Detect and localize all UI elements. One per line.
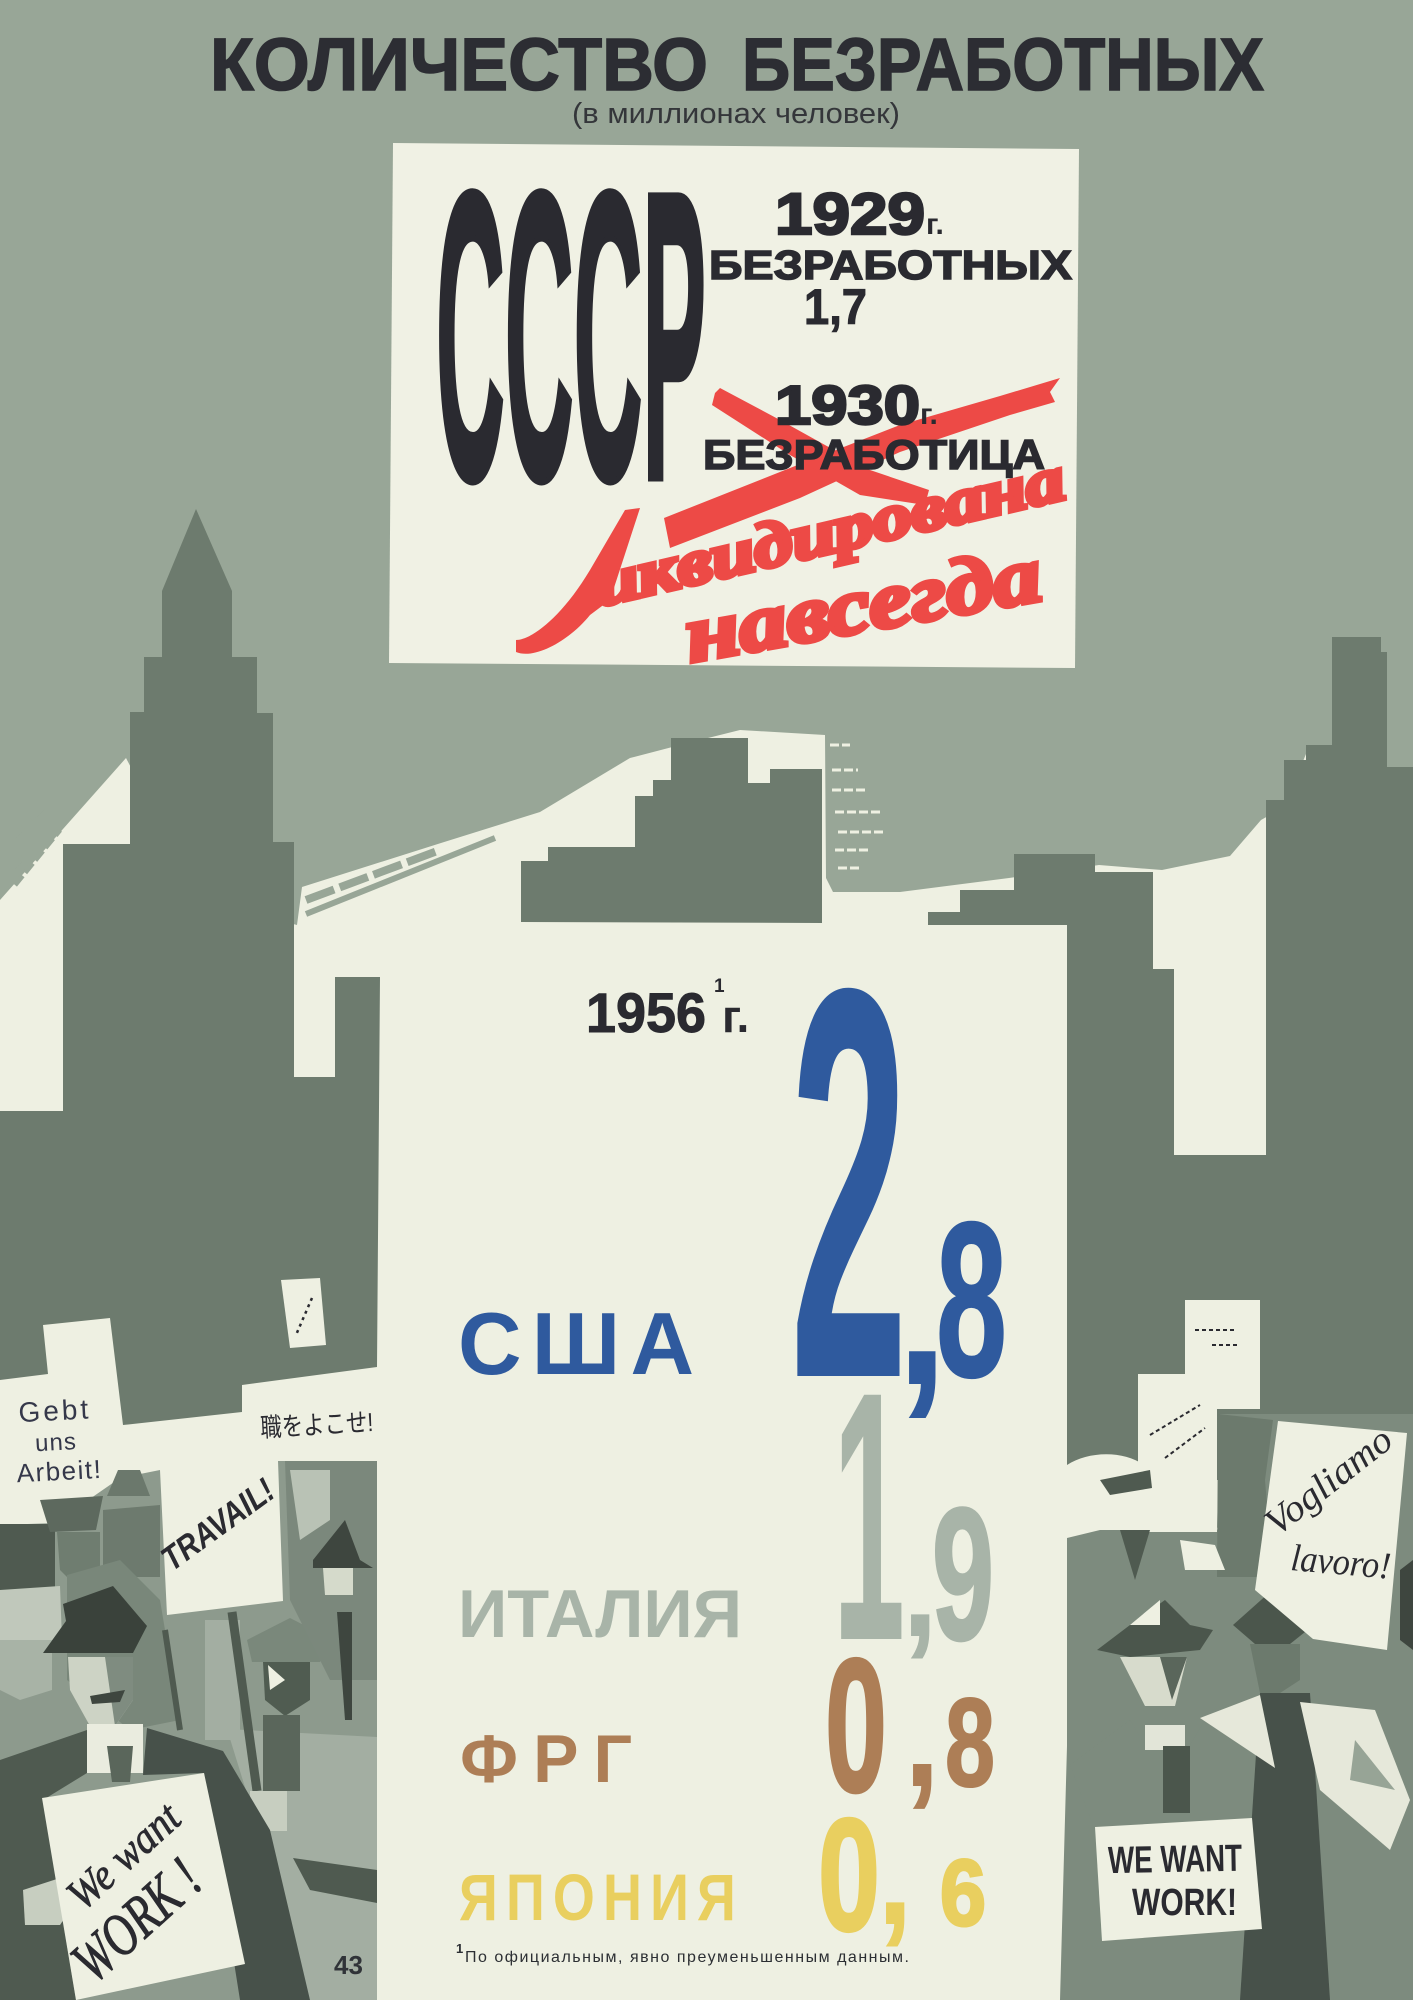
row: USA 2.8 xyxy=(458,873,1007,1494)
row: Italy 1.9: ИТАЛИЯ xyxy=(458,1576,742,1652)
sign: Gebt uns Arbeit: Arbeit! xyxy=(16,1454,103,1488)
subtitle: (в миллионах человек) xyxy=(572,98,900,130)
year 1956: 1 xyxy=(714,976,725,997)
row: Japan 0.6: 0 xyxy=(818,1785,880,1964)
sign: Gebt uns Arbeit: uns xyxy=(34,1428,78,1457)
paper windows right xyxy=(1138,1300,1260,1480)
unemployed label: БЕЗРАБОТНЫХ xyxy=(709,242,1072,288)
row: Italy 1.9: 1 xyxy=(833,1319,905,1715)
red slogan xyxy=(516,442,1071,680)
footnote xyxy=(456,1941,909,1966)
panel: green sky background xyxy=(0,0,1413,925)
row: USA 2.8: США xyxy=(458,1294,694,1393)
sign: Japanese slogan: 職をよこせ! xyxy=(260,1407,374,1443)
1930 year: 1930 xyxy=(775,374,920,436)
small paper window left xyxy=(281,1278,326,1348)
footnote: 1 xyxy=(456,1941,463,1956)
page number: 43 xyxy=(334,1950,363,1980)
row: Japan 0.6: , xyxy=(877,1793,913,1955)
panel: USSR white card xyxy=(389,107,1079,680)
right crowd illustration xyxy=(1060,1414,1413,2000)
title: БЕЗРАБОТНЫХ xyxy=(742,23,1264,106)
row: USA 2.8: , xyxy=(896,1185,948,1431)
row: FRG 0.8: , xyxy=(904,1653,940,1818)
row: FRG 0.8: 8 xyxy=(945,1674,995,1813)
1.7 value: 1,7 xyxy=(804,279,867,335)
footnote: По официальным, явно преуменьшенным данным. xyxy=(465,1949,909,1966)
red cross xyxy=(664,378,1060,548)
1929 year: 1929 xyxy=(775,182,925,247)
row: USA 2.8: 2 xyxy=(790,873,908,1494)
right skyscraper silhouette xyxy=(928,637,1413,1480)
row: Italy 1.9: , xyxy=(902,1505,938,1667)
panel: USSR white card: г. xyxy=(920,398,938,431)
year 1956: 1956 xyxy=(586,981,706,1044)
sign: Vogliamo lavoro: lavoro! xyxy=(1289,1537,1392,1588)
row: USA 2.8: 8 xyxy=(936,1176,1007,1423)
row: Japan 0.6 xyxy=(459,1785,986,1964)
red slogan: навсегда xyxy=(678,531,1048,680)
left skyscraper silhouette xyxy=(0,509,380,1425)
row: Japan 0.6: 6 xyxy=(940,1840,986,1945)
title xyxy=(210,23,1264,106)
row: FRG 0.8: ФРГ xyxy=(460,1721,632,1797)
row: FRG 0.8: 0 xyxy=(825,1620,887,1832)
sign: WE WANT WORK xyxy=(1095,1818,1262,1941)
sign: WE WANT WORK: WORK! xyxy=(1132,1882,1237,1924)
row: Italy 1.9: 9 xyxy=(932,1469,994,1679)
left crowd illustration xyxy=(0,1461,377,2000)
year 1956: г. xyxy=(722,990,749,1042)
row: Japan 0.6: ЯПОНИЯ xyxy=(459,1860,744,1934)
sign: We want work: We want xyxy=(57,1792,191,1919)
centre building silhouette xyxy=(521,738,822,923)
title: КОЛИЧЕСТВО xyxy=(210,23,708,106)
sign: Gebt uns Arbeit: Gebt xyxy=(18,1393,92,1428)
sign: WE WANT WORK: WE WANT xyxy=(1108,1838,1242,1882)
sign: Vogliamo lavoro xyxy=(1255,1419,1407,1650)
row: Italy 1.9 xyxy=(458,1319,994,1715)
sign: Gebt uns Arbeit xyxy=(13,1393,103,1488)
red slogan: иквидирована xyxy=(587,442,1071,620)
sign: We want work: WORK ! xyxy=(59,1845,214,1995)
unemployment label: БЕЗРАБОТИЦА xyxy=(703,431,1045,478)
panel: USSR white card: г. xyxy=(926,208,944,241)
row: FRG 0.8 xyxy=(460,1620,995,1832)
sign: TRAVAIL: TRAVAIL! xyxy=(154,1471,282,1578)
sign: Vogliamo lavoro: Vogliamo xyxy=(1257,1419,1401,1544)
